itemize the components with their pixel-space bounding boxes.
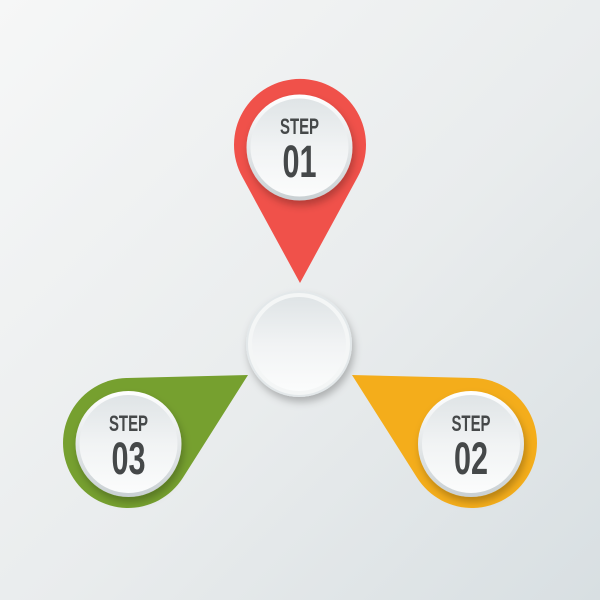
label: step 02	[451, 411, 491, 485]
label: step 02: 02	[454, 434, 488, 485]
label: step 03	[109, 411, 148, 485]
label: step 02: STEP	[451, 411, 491, 436]
label: step 03: 03	[111, 434, 146, 485]
pin: step 03 green	[63, 375, 248, 508]
label: step 01: STEP	[280, 114, 319, 139]
center circle	[247, 292, 351, 396]
pin: step 01 red	[234, 79, 366, 283]
label: step 01	[280, 114, 319, 188]
label: step 01: 01	[282, 137, 317, 188]
pin: step 02 yellow	[352, 375, 537, 508]
label: step 03: STEP	[109, 411, 148, 436]
